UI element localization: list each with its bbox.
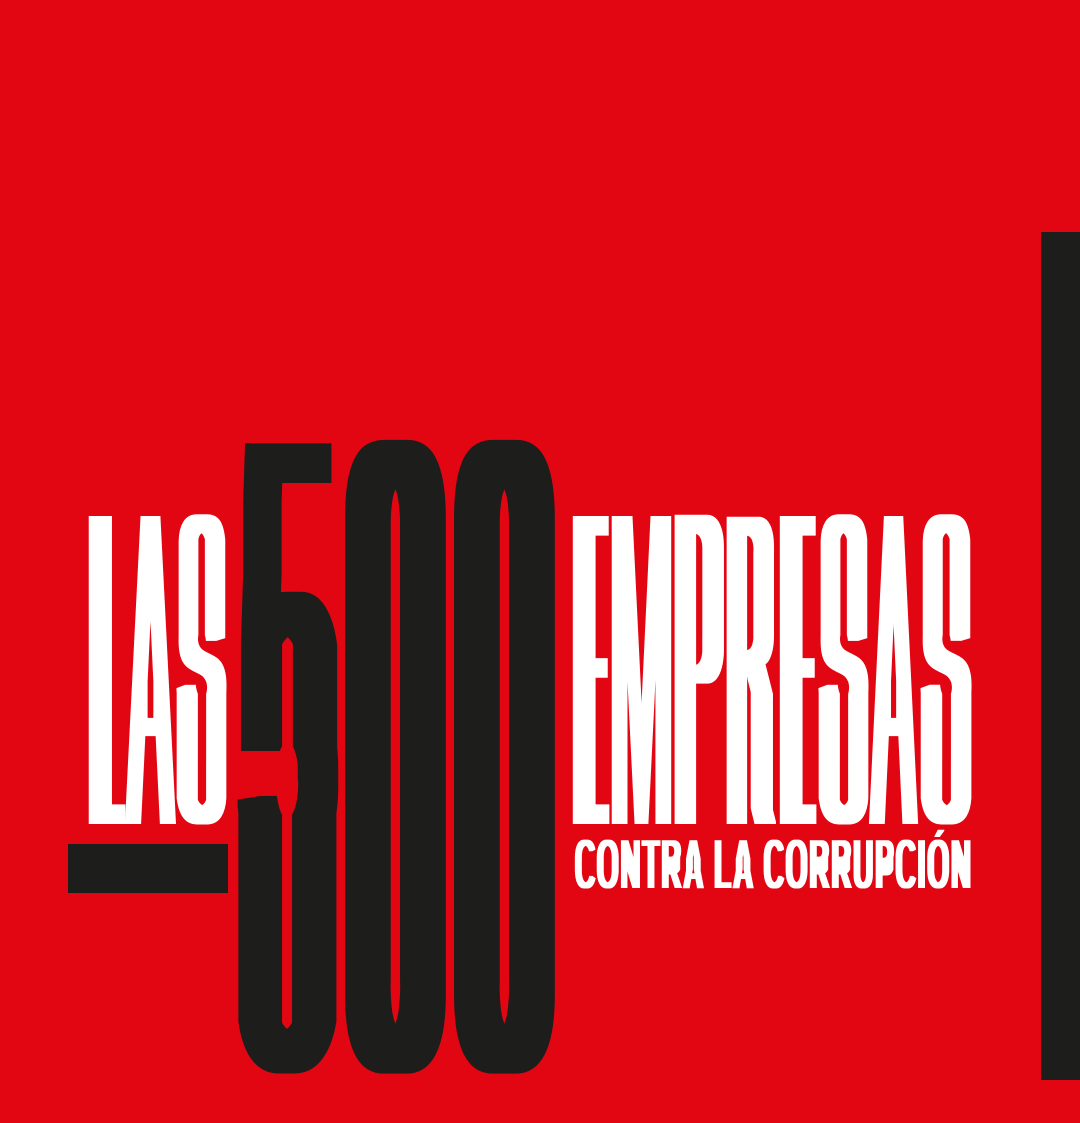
number: 500: 0	[459, 865, 550, 1110]
horizontal bar under LAS	[68, 844, 228, 893]
heading word: EMPRESAS: E	[580, 390, 602, 949]
heading word: LAS: L	[95, 391, 117, 949]
heading word: EMPRESAS: S	[924, 686, 969, 854]
heading word: EMPRESAS: R	[729, 689, 771, 856]
heading word: LAS: A	[125, 390, 176, 948]
heading word: EMPRESAS: S	[822, 686, 866, 854]
right vertical bar	[1041, 232, 1080, 1080]
heading word: LAS	[95, 390, 224, 949]
number: 500	[240, 768, 550, 1123]
subheading: CONTRA LA CORRUPCIÓN: CONTRA LA CORRUPCIÓN	[575, 840, 973, 899]
heading word: EMPRESAS: M	[610, 389, 673, 948]
heading word: EMPRESAS	[580, 389, 969, 949]
heading word: LAS: S	[180, 686, 224, 854]
number: 500: 0	[350, 865, 441, 1110]
heading word: EMPRESAS: P	[676, 687, 720, 855]
heading word: EMPRESAS: A	[870, 389, 918, 949]
heading word: EMPRESAS: E	[787, 390, 809, 949]
